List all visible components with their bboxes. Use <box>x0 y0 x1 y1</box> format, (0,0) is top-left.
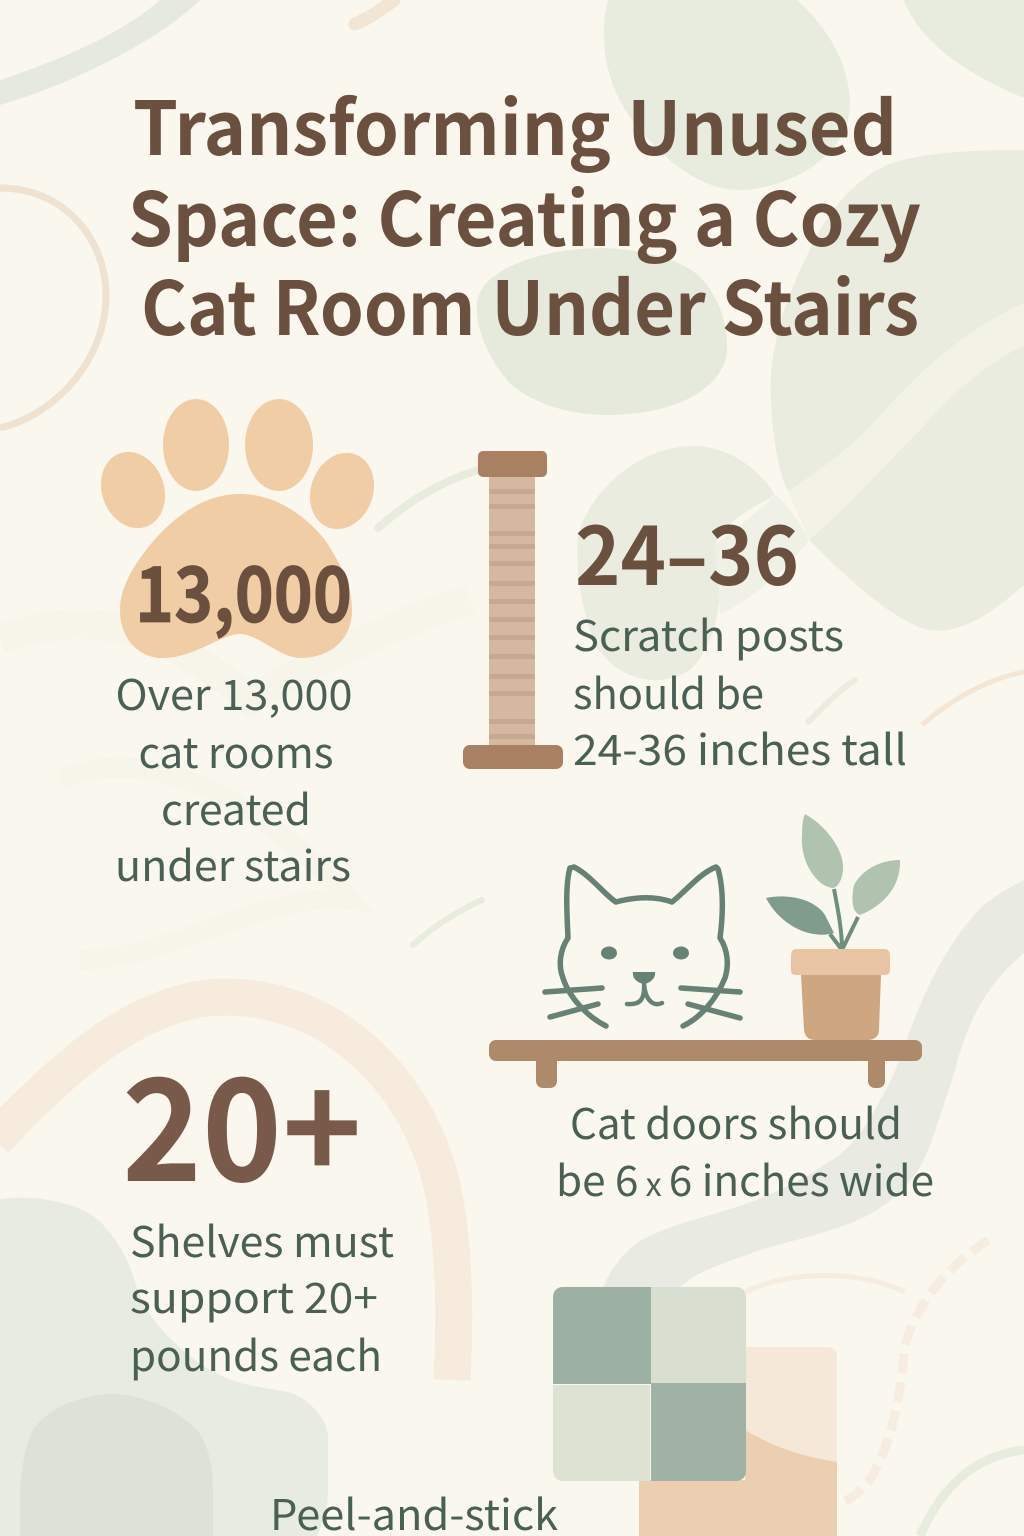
icon: shelf <box>489 1040 922 1088</box>
icon: cat face <box>545 867 740 1026</box>
text block: scratch posts: 24-36 inches tall <box>573 717 907 778</box>
text block: shelves: Shelves must <box>130 1209 394 1270</box>
text block: cat rooms: Over 13,000 <box>116 662 352 723</box>
text block: cat rooms: cat rooms <box>138 720 334 781</box>
text block: scratch posts: Scratch posts <box>573 603 844 664</box>
text block: cat doors <box>556 1091 934 1209</box>
text block: cat doors: be 6 x 6 inches wide <box>556 1148 934 1209</box>
text block: cat doors: Cat doors should <box>570 1091 902 1152</box>
text block: cat rooms <box>115 662 352 894</box>
title: Transforming Unused <box>133 70 897 177</box>
text block: shelves: support 20+ <box>130 1265 378 1326</box>
title: Cat Room Under Stairs <box>141 250 919 357</box>
icon: cat on shelf with plant <box>489 814 922 1088</box>
icon: potted plant <box>766 814 900 1040</box>
stat number: 24-36: 24–36 <box>575 493 799 609</box>
text block: shelves <box>130 1209 394 1384</box>
title <box>128 70 921 357</box>
icon: scratch post <box>463 451 563 769</box>
title: Space: Creating a Cozy <box>128 161 921 268</box>
text block: cat rooms: created <box>161 777 311 838</box>
text block: shelves: pounds each <box>130 1323 382 1384</box>
stat number: 20+: 20+ <box>122 1016 362 1222</box>
icon: paw print with 13,000 <box>91 399 384 658</box>
stat number: 13,000: 13,000 <box>135 534 352 645</box>
text block: scratch posts: should be <box>573 661 764 722</box>
text block: cat rooms: under stairs <box>115 833 351 894</box>
text block: scratch posts <box>573 603 907 778</box>
icon: peel-and-stick tiles <box>553 1287 837 1536</box>
